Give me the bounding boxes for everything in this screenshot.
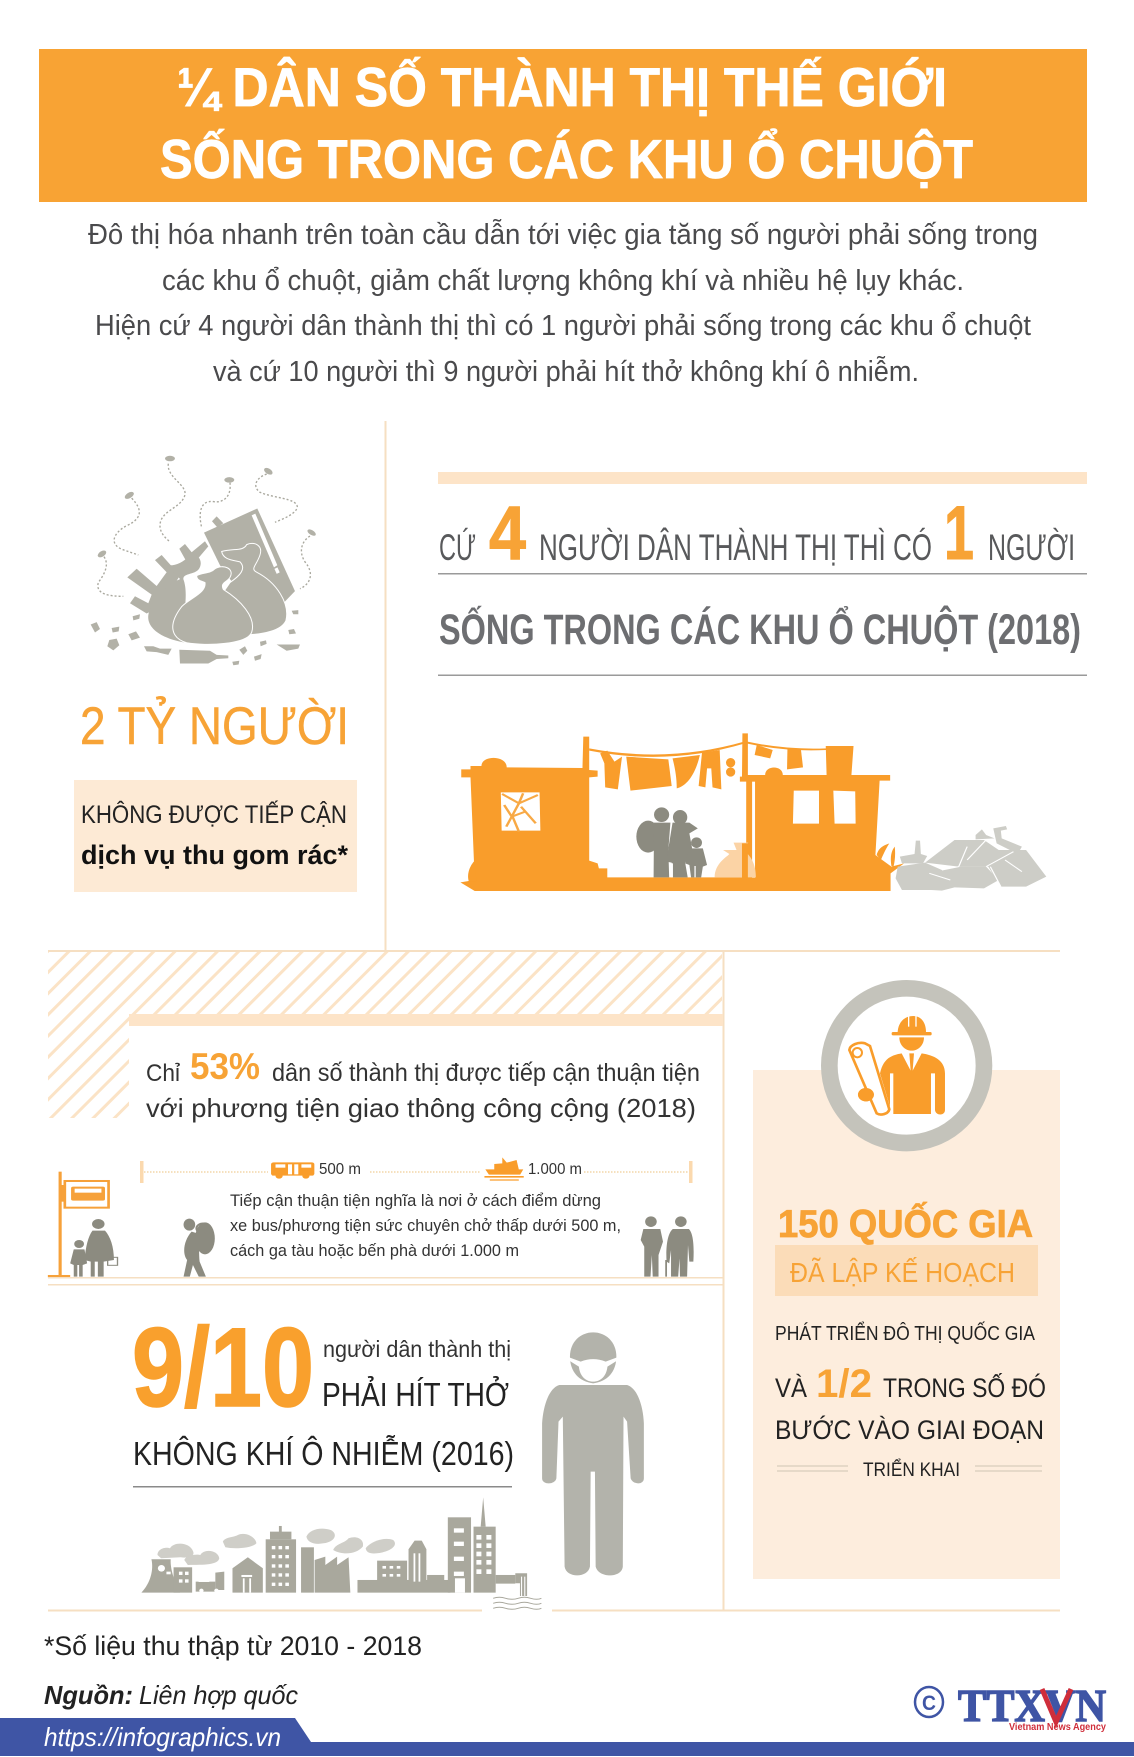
panel: public transport text — [129, 1014, 723, 1123]
icon: garbage bags — [91, 456, 317, 665]
icon: mother and child — [70, 1219, 117, 1277]
footer band — [0, 1718, 1134, 1756]
distance ruler: 1.000 m — [528, 1161, 582, 1178]
intro text: Hiện cứ 4 người dân thành thị thì có 1 người phải sống trong các khu ổ chuột — [95, 310, 1031, 342]
callout: no garbage collection: KHÔNG ĐƯỢC TIẾP CẬN — [81, 800, 347, 829]
definition text — [230, 1192, 621, 1260]
panel: air pollution stat: KHÔNG KHÍ Ô NHIỄM (2016) — [133, 1435, 514, 1472]
source — [44, 1680, 298, 1710]
intro text: Đô thị hóa nhanh trên toàn cầu dẫn tới việc gia tăng số người phải sống trong — [88, 218, 1038, 251]
illustration: bus stop and pedestrians — [48, 1172, 694, 1277]
logo: TTXVN: TTXVN — [958, 1680, 1106, 1731]
logo: TTXVN: Vietnam News Agency — [1009, 1722, 1106, 1733]
icon: engineer in ring — [829, 988, 984, 1143]
panel: public transport text: 53% — [190, 1046, 260, 1087]
footnote: *Số liệu thu thập từ 2010 - 2018 — [44, 1631, 422, 1661]
panel: national plans: BƯỚC VÀO GIAI ĐOẠN — [775, 1414, 1044, 1445]
hatched backdrop — [48, 952, 722, 1118]
panel: national plans: VÀ — [775, 1373, 807, 1403]
panel: air pollution stat — [132, 1305, 514, 1488]
illustration: slum houses and family — [460, 733, 1046, 891]
icon: elderly couple — [641, 1216, 694, 1277]
panel: national plans: TRONG SỐ ĐÓ — [883, 1371, 1046, 1403]
panel: air pollution stat: 9/10 — [132, 1305, 314, 1430]
intro text — [88, 218, 1038, 388]
panel: 4 to 1 slum heading: NGƯỜI — [988, 527, 1075, 568]
panel: 4 to 1 slum heading — [438, 472, 1087, 676]
panel: air pollution stat: PHẢI HÍT THỞ — [322, 1376, 509, 1413]
icon: person with mask — [542, 1332, 644, 1575]
logo: TTXVN: C — [922, 1692, 936, 1715]
callout: no garbage collection: dịch vụ thu gom rác* — [81, 840, 348, 870]
icon: bus — [271, 1162, 314, 1179]
distance ruler: 500 m — [319, 1161, 361, 1178]
source: Nguồn: — [44, 1680, 133, 1710]
callout: no garbage collection — [74, 780, 357, 892]
intro text: và cứ 10 người thì 9 người phải hít thở không khí ô nhiễm. — [213, 355, 919, 388]
title banner: ¼ DÂN SỐ THÀNH THỊ THẾ GIỚI — [177, 56, 947, 118]
stat: 2 billion people: 2 TỶ NGƯỜI — [80, 696, 349, 756]
title banner — [39, 49, 1087, 202]
panel: 4 to 1 slum heading: 4 — [489, 491, 526, 576]
panel: public transport text: dân số thành thị được tiếp cận thuận tiện — [272, 1059, 700, 1087]
footer band: https://infographics.vn — [44, 1722, 281, 1752]
panel: public transport text: với phương tiện giao thông công cộng (2018) — [146, 1093, 696, 1123]
panel: air pollution stat: người dân thành thị — [323, 1336, 511, 1362]
source: Liên hợp quốc — [139, 1680, 298, 1710]
distance ruler — [140, 1157, 692, 1183]
panel: national plans — [753, 988, 1060, 1579]
icon: bus stop sign — [48, 1172, 109, 1277]
panel: national plans: 150 QUỐC GIA — [778, 1201, 1033, 1246]
panel: 4 to 1 slum heading: CỨ — [439, 527, 476, 568]
definition text: Tiếp cận thuận tiện nghĩa là nơi ở cách điểm dừng — [230, 1192, 601, 1210]
illustration: polluted city skyline — [141, 1497, 541, 1609]
intro text: các khu ổ chuột, giảm chất lượng không khí và nhiều hệ lụy khác. — [162, 265, 964, 297]
panel: national plans: PHÁT TRIỂN ĐÔ THỊ QUỐC GIA — [775, 1321, 1036, 1345]
panel: national plans: TRIỂN KHAI — [863, 1459, 960, 1481]
panel: national plans: ĐÃ LẬP KẾ HOẠCH — [790, 1257, 1015, 1288]
icon: backpacker — [184, 1219, 215, 1277]
title banner: SỐNG TRONG CÁC KHU Ổ CHUỘT — [160, 128, 973, 190]
definition text: xe bus/phương tiện sức chuyên chở thấp dưới 500 m, — [230, 1217, 621, 1235]
panel: national plans: 1/2 — [816, 1362, 872, 1406]
icon: ferry — [484, 1157, 524, 1181]
definition text: cách ga tàu hoặc bến phà dưới 1.000 m — [230, 1242, 519, 1260]
panel: 4 to 1 slum heading: 1 — [944, 491, 974, 576]
panel: public transport text: Chỉ — [146, 1060, 181, 1087]
panel: 4 to 1 slum heading: NGƯỜI DÂN THÀNH THỊ THÌ CÓ — [539, 527, 932, 568]
